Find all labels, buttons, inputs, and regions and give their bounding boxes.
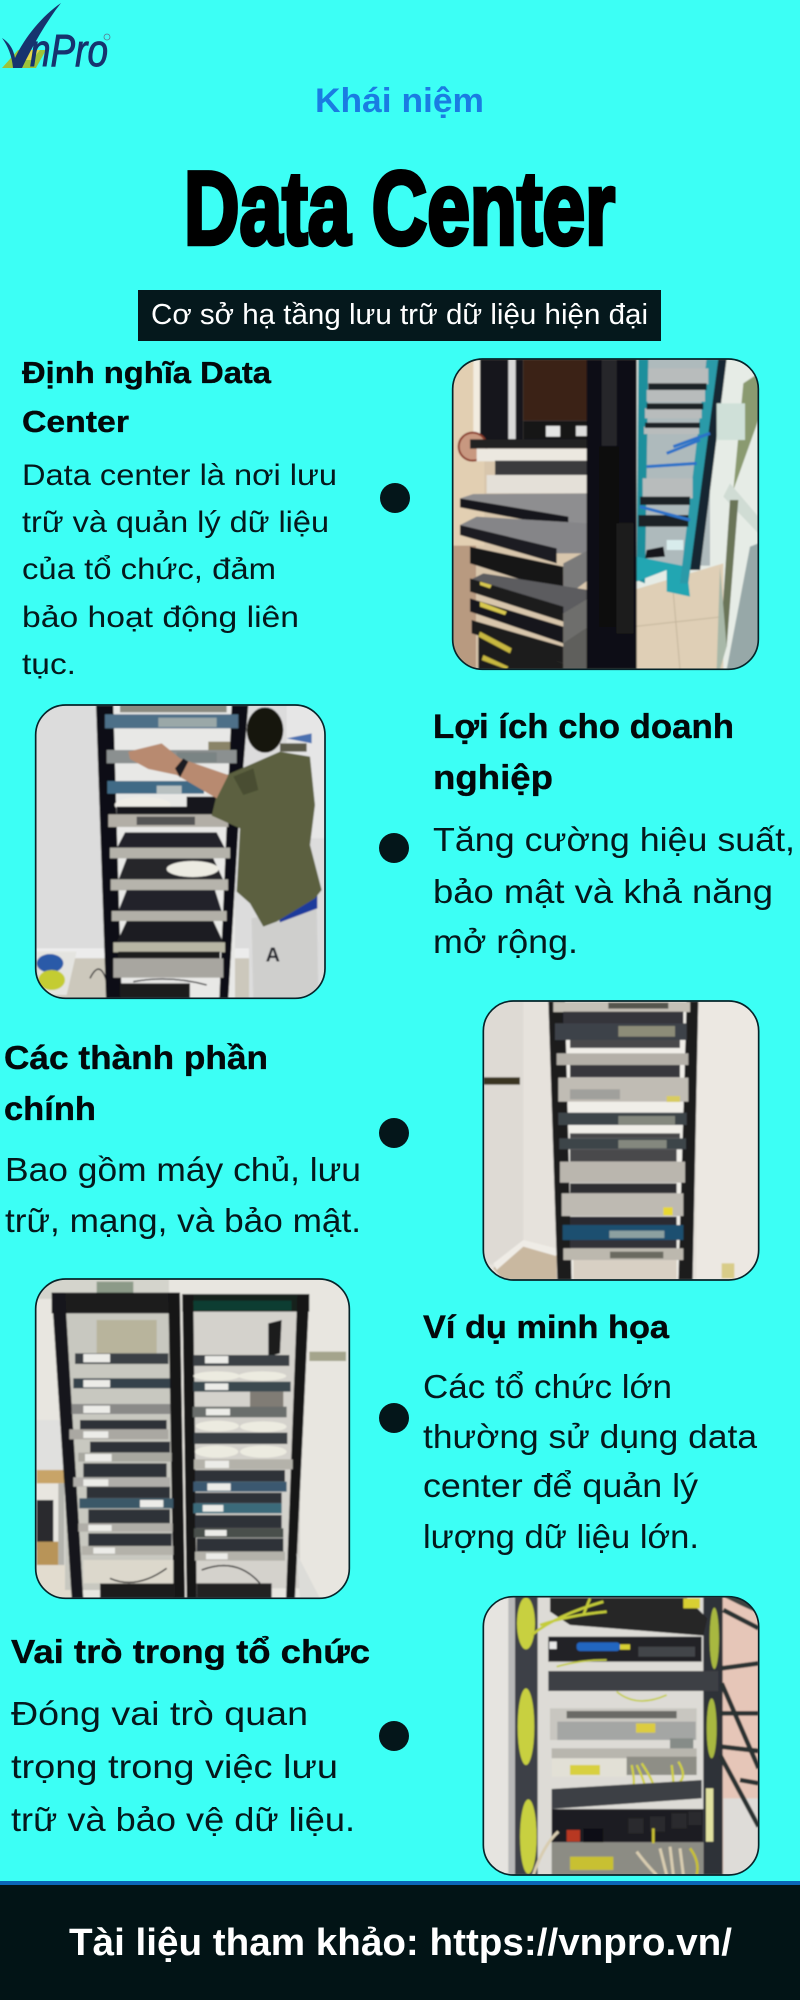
text block: định nghĩa: trữ và quản lý dữ liệu [22, 506, 329, 539]
text block: ví dụ: thường sử dụng data [423, 1418, 758, 1455]
heading: lợi ích: nghiệp [433, 759, 553, 797]
text block: định nghĩa [22, 459, 337, 681]
footer reference text: Tài liệu tham khảo: https://vnpro.vn/ [69, 1922, 732, 1964]
timeline dot 1 [380, 483, 410, 513]
text block: lợi ích: bảo mật và khả năng [433, 873, 773, 910]
photo: two black racks [33, 1277, 352, 1600]
subtitle heading: Khái niệm: Khái niệm [315, 82, 484, 120]
text block: vai trò: Đóng vai trò quan [11, 1695, 308, 1732]
timeline dot 5 [379, 1721, 409, 1751]
text block: vai trò [11, 1695, 355, 1838]
heading: các thành phần [4, 1039, 268, 1127]
heading: các thành phần: Các thành phần [4, 1039, 268, 1076]
photo: equipment rack against white wall [482, 999, 760, 1282]
timeline dot 3 [379, 1118, 409, 1148]
heading: lợi ích [433, 708, 734, 797]
text block: ví dụ [423, 1368, 758, 1555]
panel: định nghĩa data center [22, 355, 410, 681]
heading: định nghĩa: Center [22, 404, 129, 439]
photo: technician working on rack [33, 703, 327, 1000]
text block: lợi ích: Tăng cường hiệu suất, [433, 821, 795, 858]
heading: vai trò: Vai trò trong tổ chức [11, 1633, 370, 1670]
footer bar [0, 1881, 800, 2000]
text block: định nghĩa: Data center là nơi lưu [22, 459, 337, 492]
photo: server racks in data room [450, 357, 760, 672]
title: Data Center: Data Center [184, 151, 615, 267]
panel: lợi ích cho doanh nghiệp [379, 708, 795, 960]
text block: ví dụ: lượng dữ liệu lớn. [423, 1518, 699, 1555]
photo: rack with yellow cabling [482, 1595, 760, 1877]
text block: các thành phần: Bao gồm máy chủ, lưu [5, 1151, 361, 1188]
photo: technician working on rack: A [266, 945, 280, 967]
tagline banner: Cơ sở hạ tầng lưu trữ dữ liệu hiện đại [151, 299, 648, 331]
text block: ví dụ: Các tổ chức lớn [423, 1368, 672, 1405]
heading: định nghĩa: Định nghĩa Data [22, 355, 272, 390]
panel: ví dụ minh họa [379, 1309, 758, 1555]
panel: vai trò trong tổ chức [11, 1633, 409, 1838]
text block: định nghĩa: tục. [22, 648, 76, 681]
text block: lợi ích: mở rộng. [433, 923, 578, 960]
text block: các thành phần: trữ, mạng, và bảo mật. [5, 1202, 361, 1239]
panel: các thành phần chính [4, 1039, 409, 1239]
timeline dot 2 [379, 833, 409, 863]
timeline dot 4 [379, 1403, 409, 1433]
logo: VnPro [2, 3, 110, 76]
text block: lợi ích [433, 821, 795, 960]
heading: các thành phần: chính [4, 1090, 96, 1127]
text block: vai trò: trọng trong việc lưu [11, 1748, 338, 1785]
text block: các thành phần [5, 1151, 361, 1239]
tagline banner [138, 290, 661, 341]
logo: VnPro: nPro [30, 25, 108, 76]
text block: định nghĩa: của tổ chức, đảm [22, 553, 276, 586]
text block: vai trò: trữ và bảo vệ dữ liệu. [11, 1801, 355, 1838]
text block: định nghĩa: bảo hoạt động liên [22, 601, 299, 634]
heading: ví dụ: Ví dụ minh họa [423, 1309, 669, 1345]
heading: định nghĩa [22, 355, 272, 439]
heading: lợi ích: Lợi ích cho doanh [433, 708, 734, 746]
text block: ví dụ: center để quản lý [423, 1467, 699, 1504]
